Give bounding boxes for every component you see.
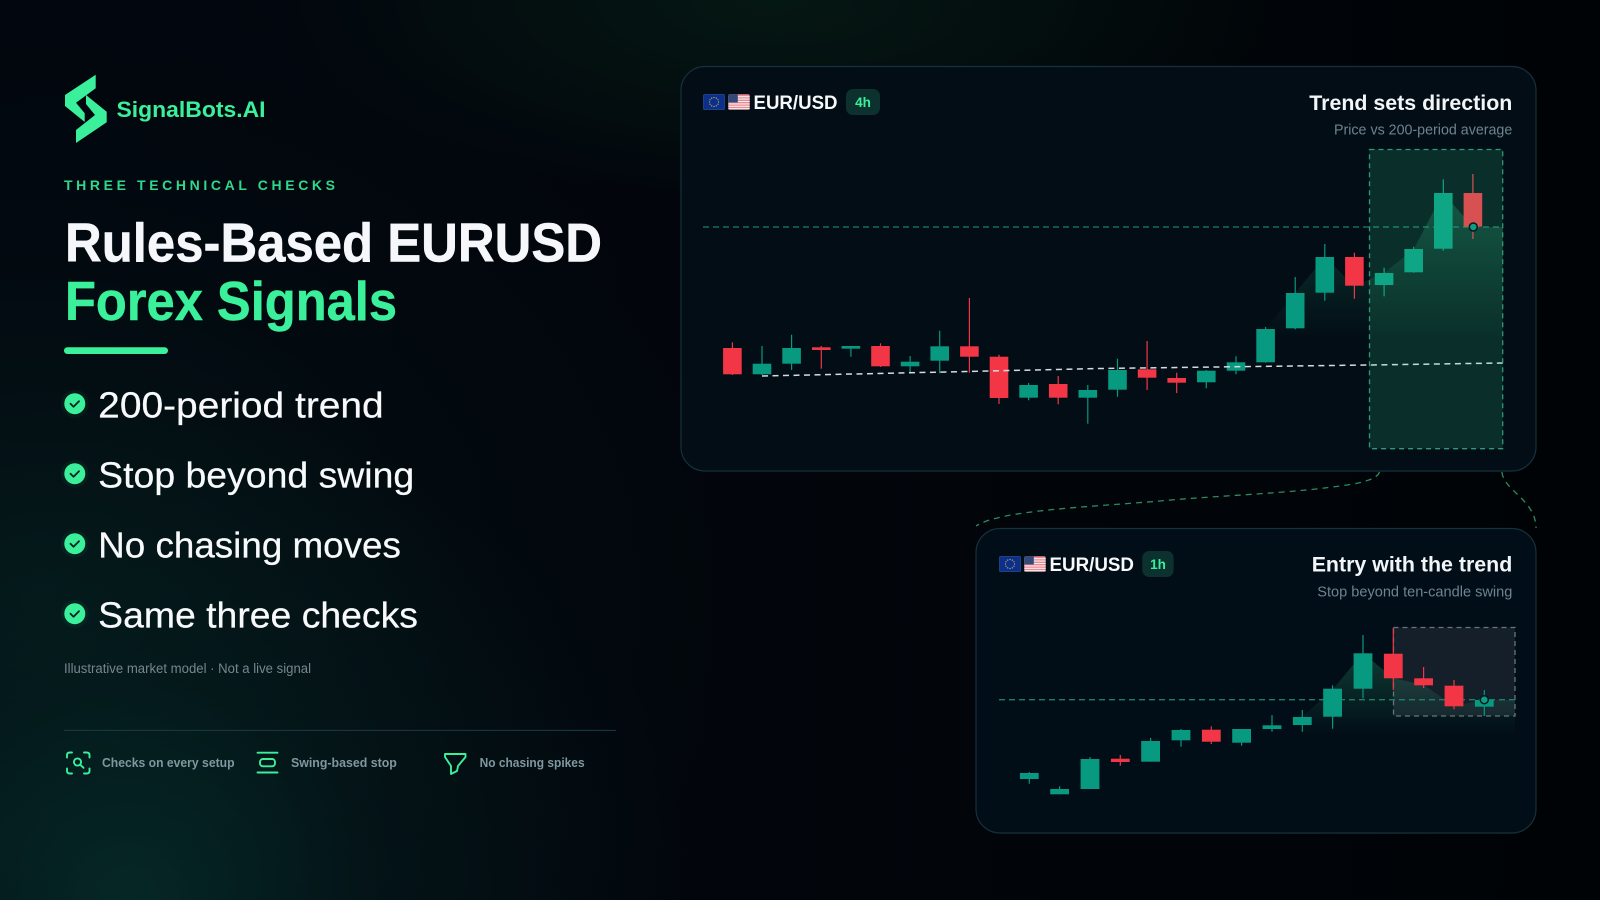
icon: scan search: [67, 752, 90, 774]
icon: swing range: [258, 753, 278, 772]
panel subheading: Stop beyond ten-candle swing: [1317, 584, 1512, 600]
logo: SignalBots.AI: [65, 75, 266, 143]
flag: EU: [999, 556, 1021, 572]
timeframe badge: 4h: [855, 95, 871, 110]
label: swing-based stop: Swing-based stop: [291, 756, 397, 770]
panel: 1h entry chart: [976, 528, 1536, 833]
item: 200-period trend: 200-period trend: [98, 384, 384, 425]
price area: [1236, 193, 1503, 449]
label: no chasing spikes: No chasing spikes: [480, 756, 585, 770]
panel heading: Entry with the trend: [1312, 553, 1512, 577]
checklist: [61, 384, 418, 636]
timeframe badge: [1142, 551, 1174, 577]
pair label: EUR/USD: [754, 93, 838, 114]
price area: [1302, 653, 1515, 745]
panel: 4h trend chart: [681, 66, 1536, 471]
panel heading: Trend sets direction: [1309, 91, 1512, 115]
icon: S mark: [65, 75, 107, 143]
title: Forex Signals: [65, 270, 397, 332]
candlesticks 4h: [723, 174, 1482, 424]
panel subheading: Price vs 200-period average: [1334, 122, 1512, 138]
flag: US: [1024, 556, 1046, 572]
eyebrow: THREE TECHNICAL CHECKS: [64, 177, 335, 193]
signal marker: [1469, 223, 1477, 231]
disclaimer: Illustrative market model · Not a live signal: [64, 661, 311, 676]
item: no chasing moves: No chasing moves: [98, 524, 401, 565]
brand name: SignalBots.AI: [116, 97, 266, 122]
stop zone: [1394, 628, 1515, 716]
candlesticks 1h: [1020, 628, 1494, 794]
entry marker: [1480, 696, 1488, 704]
pair label: EUR/USD: [1050, 555, 1134, 576]
title: [65, 212, 602, 332]
200-period average line: [762, 363, 1503, 376]
title underline: [64, 347, 168, 354]
feature row: [67, 752, 585, 774]
item: same three checks: Same three checks: [98, 594, 418, 636]
title: Rules-Based EURUSD: [65, 212, 602, 274]
timeframe badge: 1h: [1150, 557, 1166, 572]
connector lines between panels: [976, 472, 1536, 528]
timeframe badge: [846, 89, 880, 115]
flag: EU: [703, 94, 725, 110]
label: checks on every setup: Checks on every setup: [102, 756, 235, 770]
item: stop beyond swing: Stop beyond swing: [98, 454, 414, 495]
icon: funnel: [445, 754, 466, 774]
flag: US: [728, 94, 750, 110]
highlight zone: [1370, 150, 1503, 449]
